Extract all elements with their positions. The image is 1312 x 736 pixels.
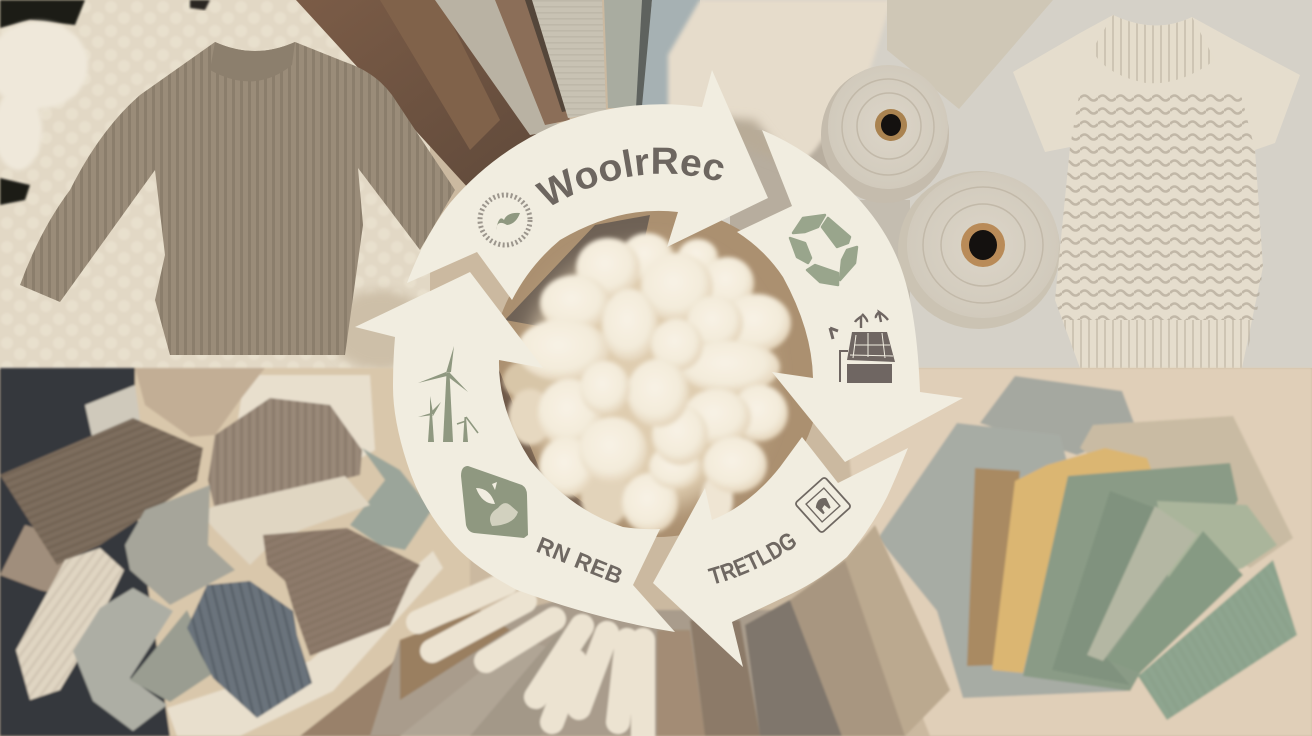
grey blanket [878,423,1127,698]
icon: wind turbines [418,346,478,442]
stamp: circular seal [480,195,530,245]
raw fleece tuft [668,0,892,175]
knitted swatch [887,0,1053,109]
grey-green knit [350,448,432,550]
yarn cone upper [821,65,949,203]
beige swatch [1080,416,1293,568]
yarn cone lower [898,171,1060,329]
background: top-right panel with yarn cones [668,0,1312,368]
centre panel: brown backdrop with wool tufts [490,207,821,540]
cream ribbed roll [16,548,124,700]
background: bottom-right tan panel with folded textiles [840,368,1312,736]
label: RN REB: RN REB [533,532,627,590]
taupe rib knit [208,398,362,510]
background: top-left fleece panel [0,0,430,370]
background: bottom-left dark panel with pile of knitwear [0,368,470,736]
grey skirt [980,376,1137,455]
sage cloth back [1023,463,1238,691]
brown cloth [967,468,1020,666]
taupe ribbed sweater [20,42,455,355]
brown socks [263,528,420,656]
cream knit tee [1013,15,1300,368]
tan cloth [135,368,265,437]
pale sage cloth [1157,501,1277,590]
slate mitten [187,581,312,718]
arrow: left with wind turbines, leaf badge and RN REB label [355,272,675,632]
arrow: lower right with TRETLDG label [653,437,908,667]
label: WoolrRec: WoolrRec [534,148,724,206]
arrow: right with recycle and solar icons [737,130,963,462]
icon: leaf badge [461,466,528,538]
sage ribbed front [1138,560,1297,720]
stamp: square seal [795,477,851,533]
icon: recycle ring [790,215,857,285]
grey knit [125,485,235,605]
cream knit [200,476,370,565]
arrow: top with WoolrRec label [407,70,768,300]
mustard cloth [992,448,1153,673]
cream fleece under pile [230,375,375,470]
sage cloth [1052,491,1155,685]
sage ribbed cloth [1107,531,1243,673]
grey cuff [130,610,215,702]
pale beanie [73,588,173,731]
light grey cloth [1087,506,1197,661]
background: top-centre fabric fan [296,0,705,190]
white knit [85,385,140,450]
label: TRETLDG: TRETLDG [708,534,796,584]
icon: solar building [830,312,895,383]
brown sweater [0,418,203,595]
background: bottom-centre fabric fan [370,525,950,736]
